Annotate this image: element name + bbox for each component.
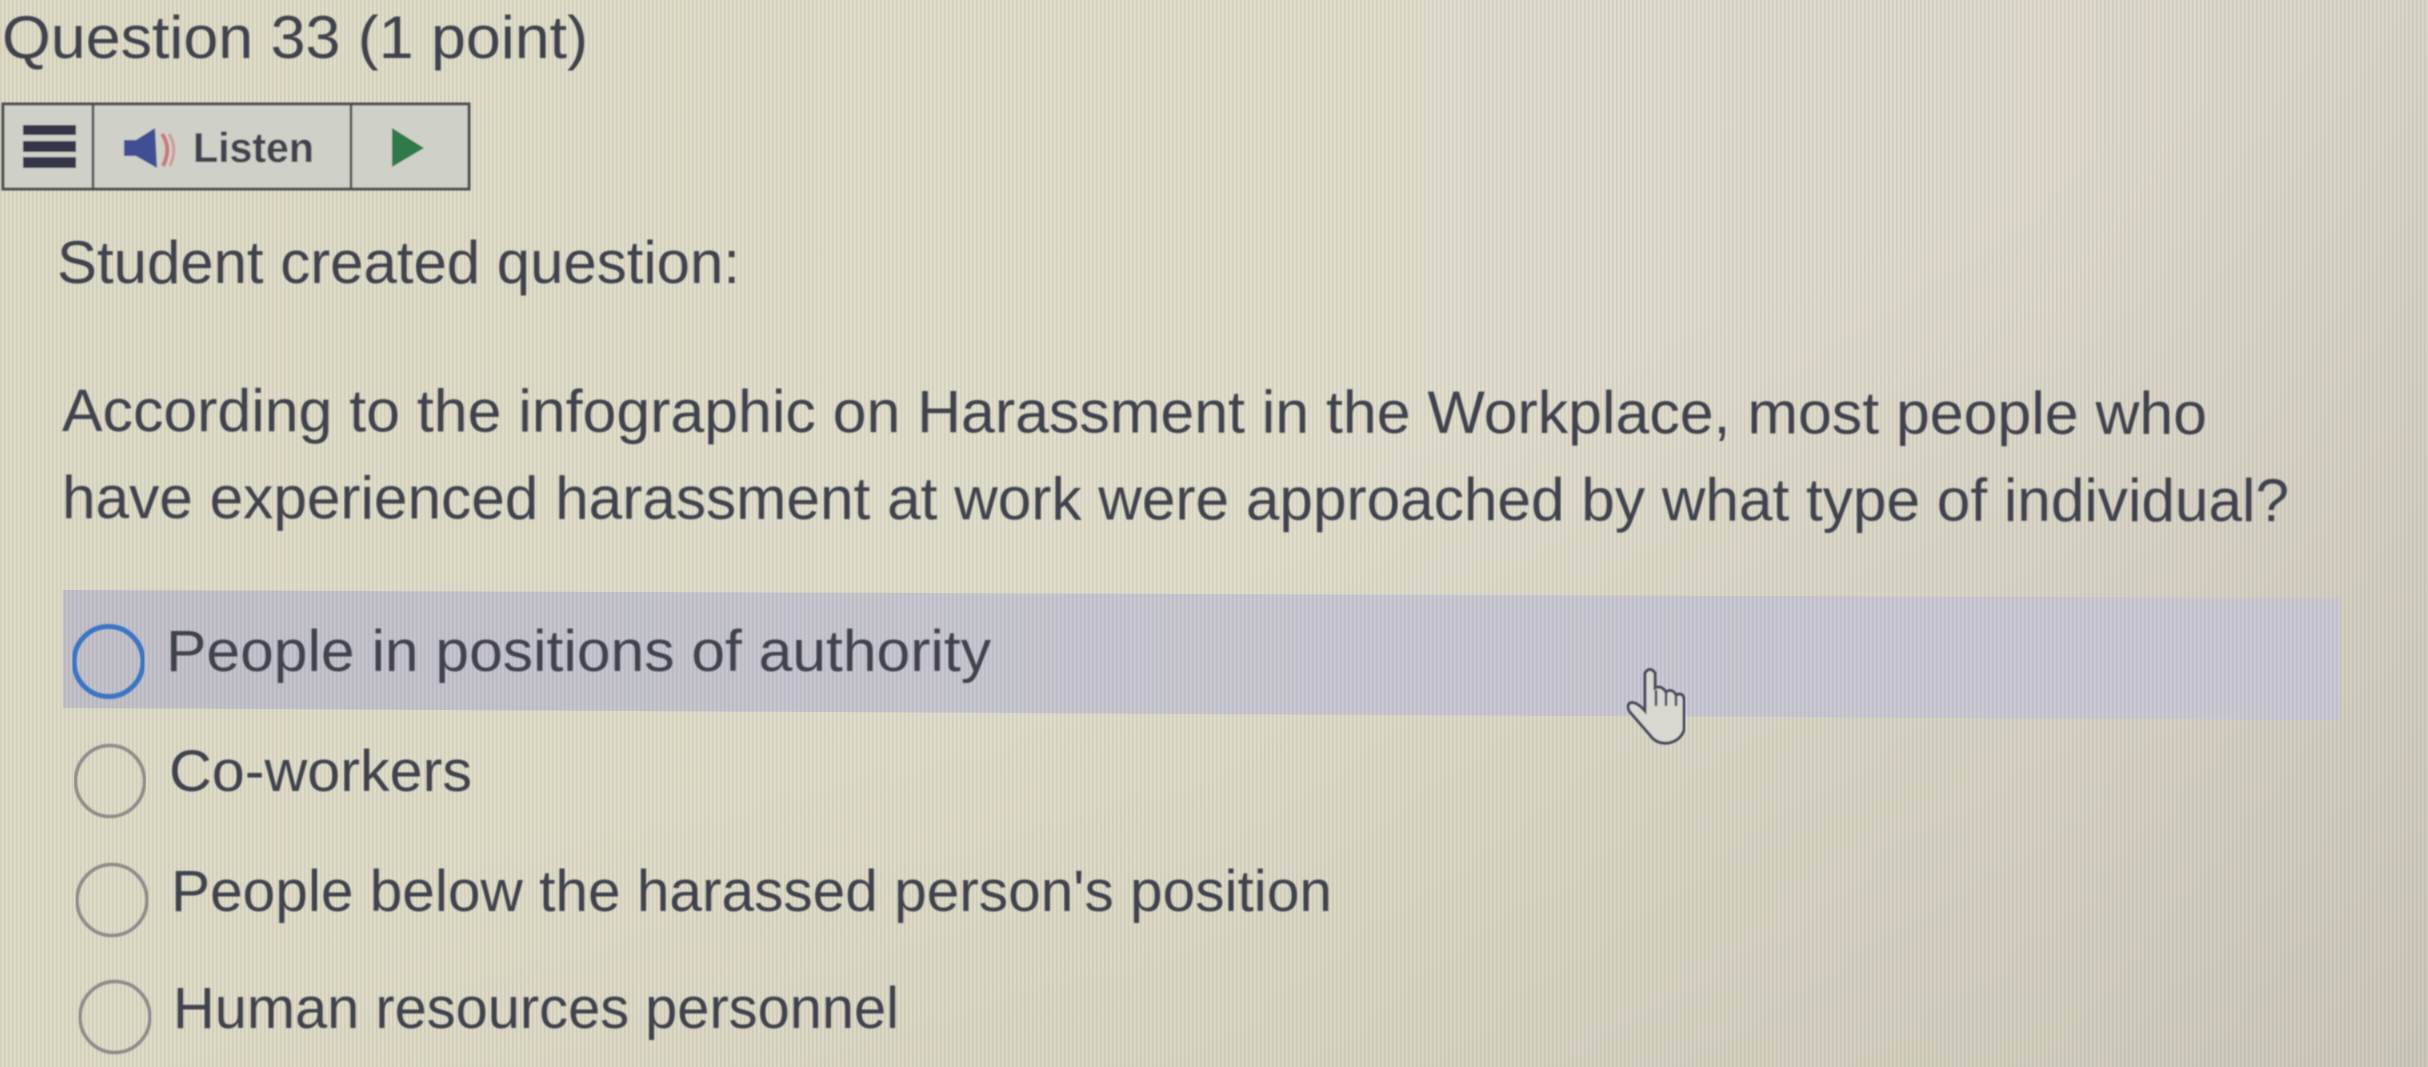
answer text: Human resources personnel xyxy=(173,976,899,1041)
answer option: co-workers xyxy=(76,739,472,816)
icon: hand cursor xyxy=(1628,670,1684,743)
text: question body xyxy=(62,377,2289,534)
answer option: people below the harassed person's position xyxy=(77,859,1332,936)
answer option: human resources personnel xyxy=(80,976,899,1052)
toolbar: listen control xyxy=(3,104,469,189)
label: listen: Listen xyxy=(193,124,314,171)
answer option: people in positions of authority (hovered) xyxy=(63,590,2340,720)
radio button xyxy=(80,982,150,1052)
answer text: People in positions of authority xyxy=(166,619,991,684)
radio button xyxy=(77,864,147,936)
text: question body: have experienced harassment at work were approached by what type of individual? xyxy=(62,464,2289,534)
heading: question number: Question 33 (1 point) xyxy=(2,4,588,71)
text: question body: According to the infographic on Harassment in the Workplace, most people who xyxy=(62,377,2207,447)
icon: speaker xyxy=(124,128,174,168)
icon: menu xyxy=(23,125,76,168)
icon: play arrow xyxy=(392,128,424,167)
text: student created question: Student created question: xyxy=(57,229,740,296)
radio button xyxy=(76,746,144,816)
answer text: People below the harassed person's position xyxy=(171,859,1332,924)
radio button: selected hover xyxy=(74,626,143,696)
answer text: Co-workers xyxy=(169,739,472,804)
